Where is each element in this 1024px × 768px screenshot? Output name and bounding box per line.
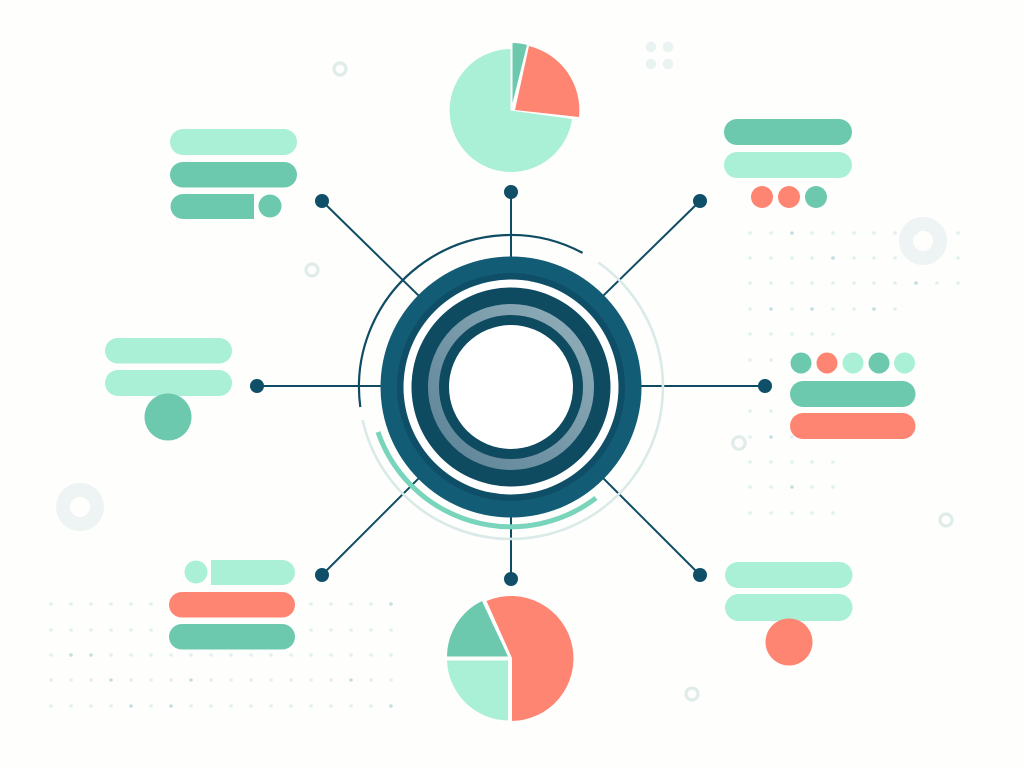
dot grid: lower left [51, 604, 391, 706]
dot grid: right [750, 233, 958, 513]
panel: upper right bars [724, 119, 852, 208]
pie chart: top [450, 43, 579, 172]
central hub [380, 256, 642, 518]
decorative dot cluster [646, 42, 673, 69]
connector lines and end dots [250, 185, 772, 586]
arc: dark outer [359, 235, 583, 407]
arc: green accent [378, 432, 596, 527]
panel: upper left bars [170, 129, 297, 219]
panel: left bars [105, 338, 232, 440]
panel: right bars [790, 352, 916, 439]
decorative large ring: upper right [906, 224, 940, 258]
pie chart: bottom [447, 596, 573, 721]
panel: lower left bars [169, 560, 295, 650]
decorative small rings [306, 63, 952, 700]
arc: light outer [363, 263, 663, 539]
decorative large ring: left [63, 490, 97, 524]
panel: lower right bars [725, 562, 852, 666]
